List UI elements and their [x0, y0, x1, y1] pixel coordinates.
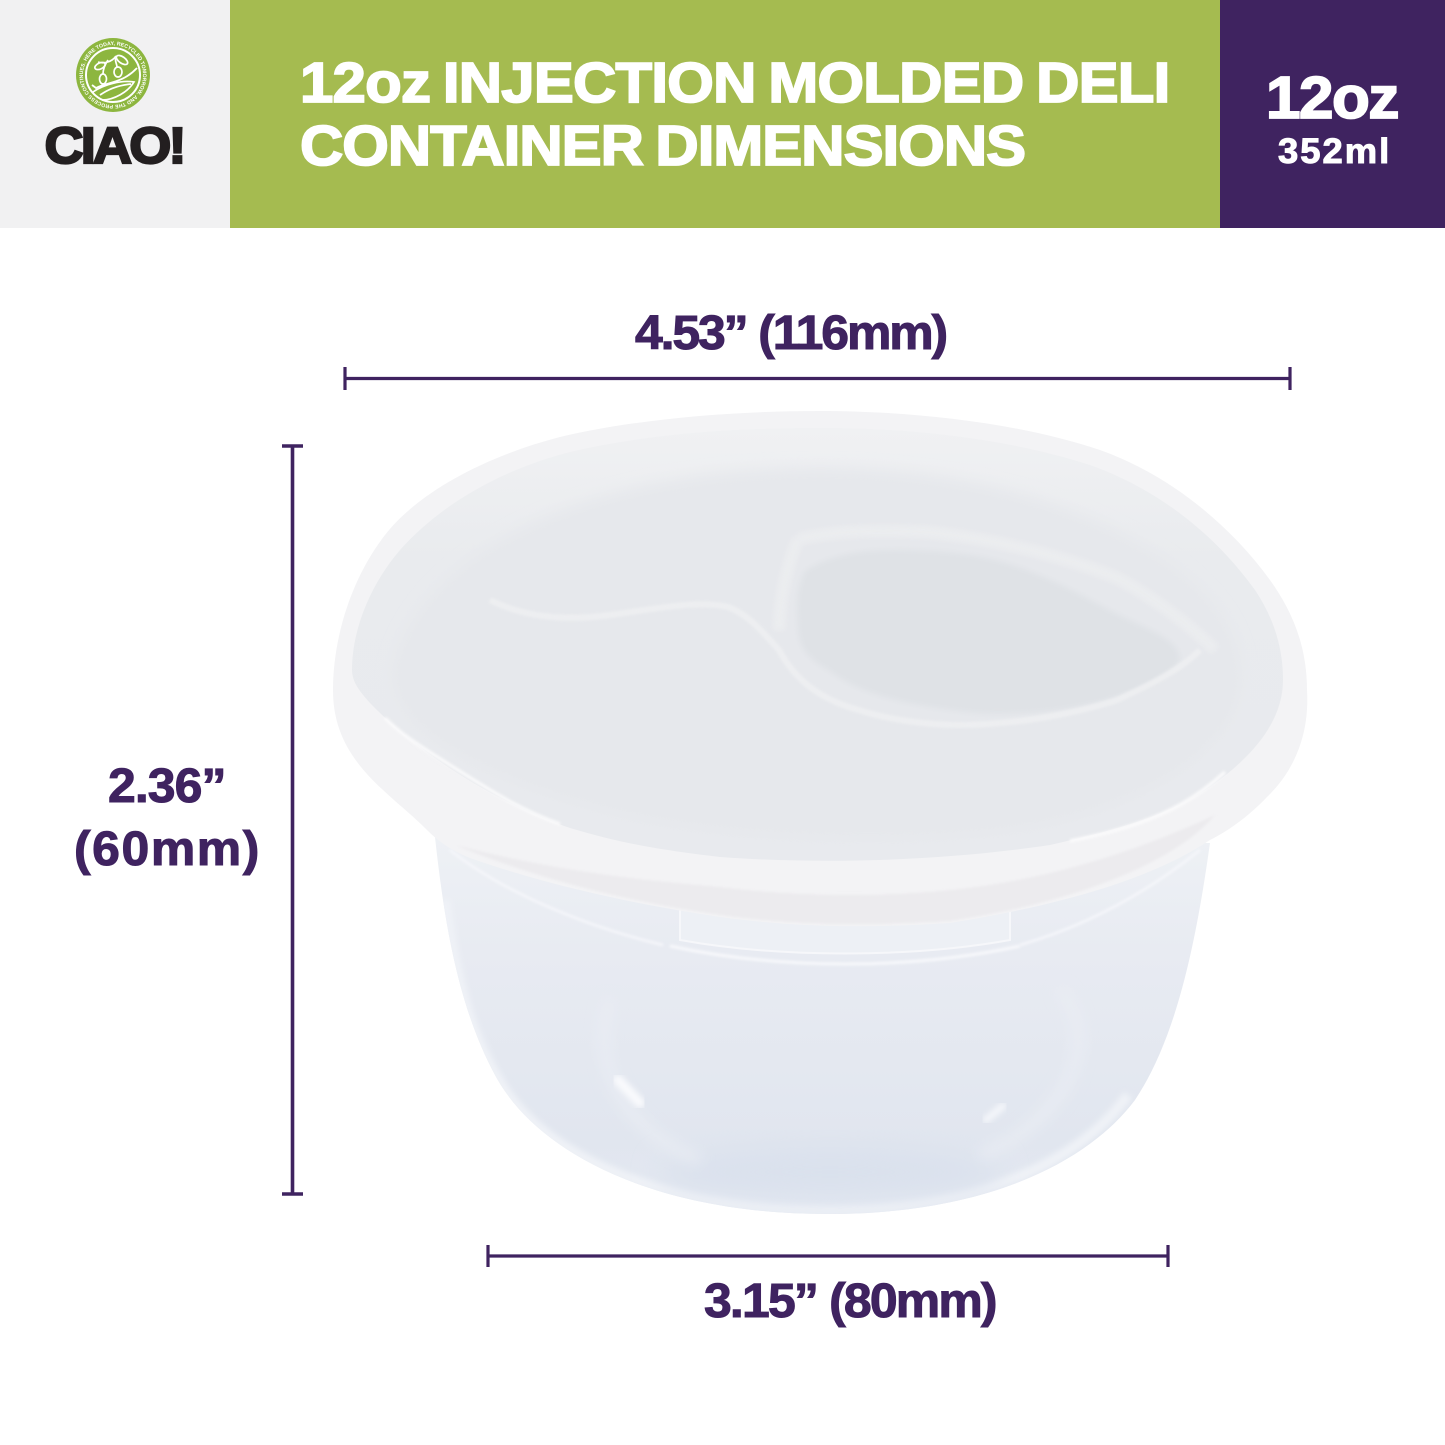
lid silhouette — [333, 411, 1307, 926]
lid compartment — [490, 531, 1215, 725]
body tab — [680, 905, 1010, 954]
width dimension — [345, 306, 1290, 390]
width line — [345, 367, 1290, 390]
base label: 3.15” (80mm) — [704, 1274, 998, 1328]
height label: 2.36” — [108, 759, 226, 813]
lid rim highlights — [385, 718, 560, 824]
lid inner recess — [391, 468, 1243, 839]
size badge text: 12oz — [1266, 64, 1399, 131]
title text: 12oz INJECTION MOLDED DELI — [300, 52, 1170, 115]
height line — [282, 446, 303, 1194]
base line — [488, 1245, 1168, 1267]
size badge text — [1266, 64, 1399, 171]
deli container — [333, 411, 1307, 1214]
lid top surface — [352, 428, 1283, 861]
size badge text: 352ml — [1278, 132, 1389, 171]
lid band — [455, 815, 1215, 924]
title panel — [230, 0, 1220, 228]
base dimension — [488, 1245, 1168, 1328]
container body — [435, 837, 1210, 1214]
logo emblem: PROCESS CONTINUES. HERE TODAY, RECYCLED TOMORROW. AND THE — [79, 41, 147, 108]
height label — [74, 759, 259, 876]
width label: 4.53” (116mm) — [635, 306, 948, 360]
logo panel — [0, 0, 230, 228]
height label: (60mm) — [74, 822, 259, 876]
logo wordmark: CIAO! — [44, 117, 187, 175]
header band — [0, 0, 1445, 228]
title text: CONTAINER DIMENSIONS — [300, 115, 1026, 178]
title text — [300, 52, 1170, 178]
size panel — [1220, 0, 1445, 228]
height dimension — [74, 446, 303, 1194]
